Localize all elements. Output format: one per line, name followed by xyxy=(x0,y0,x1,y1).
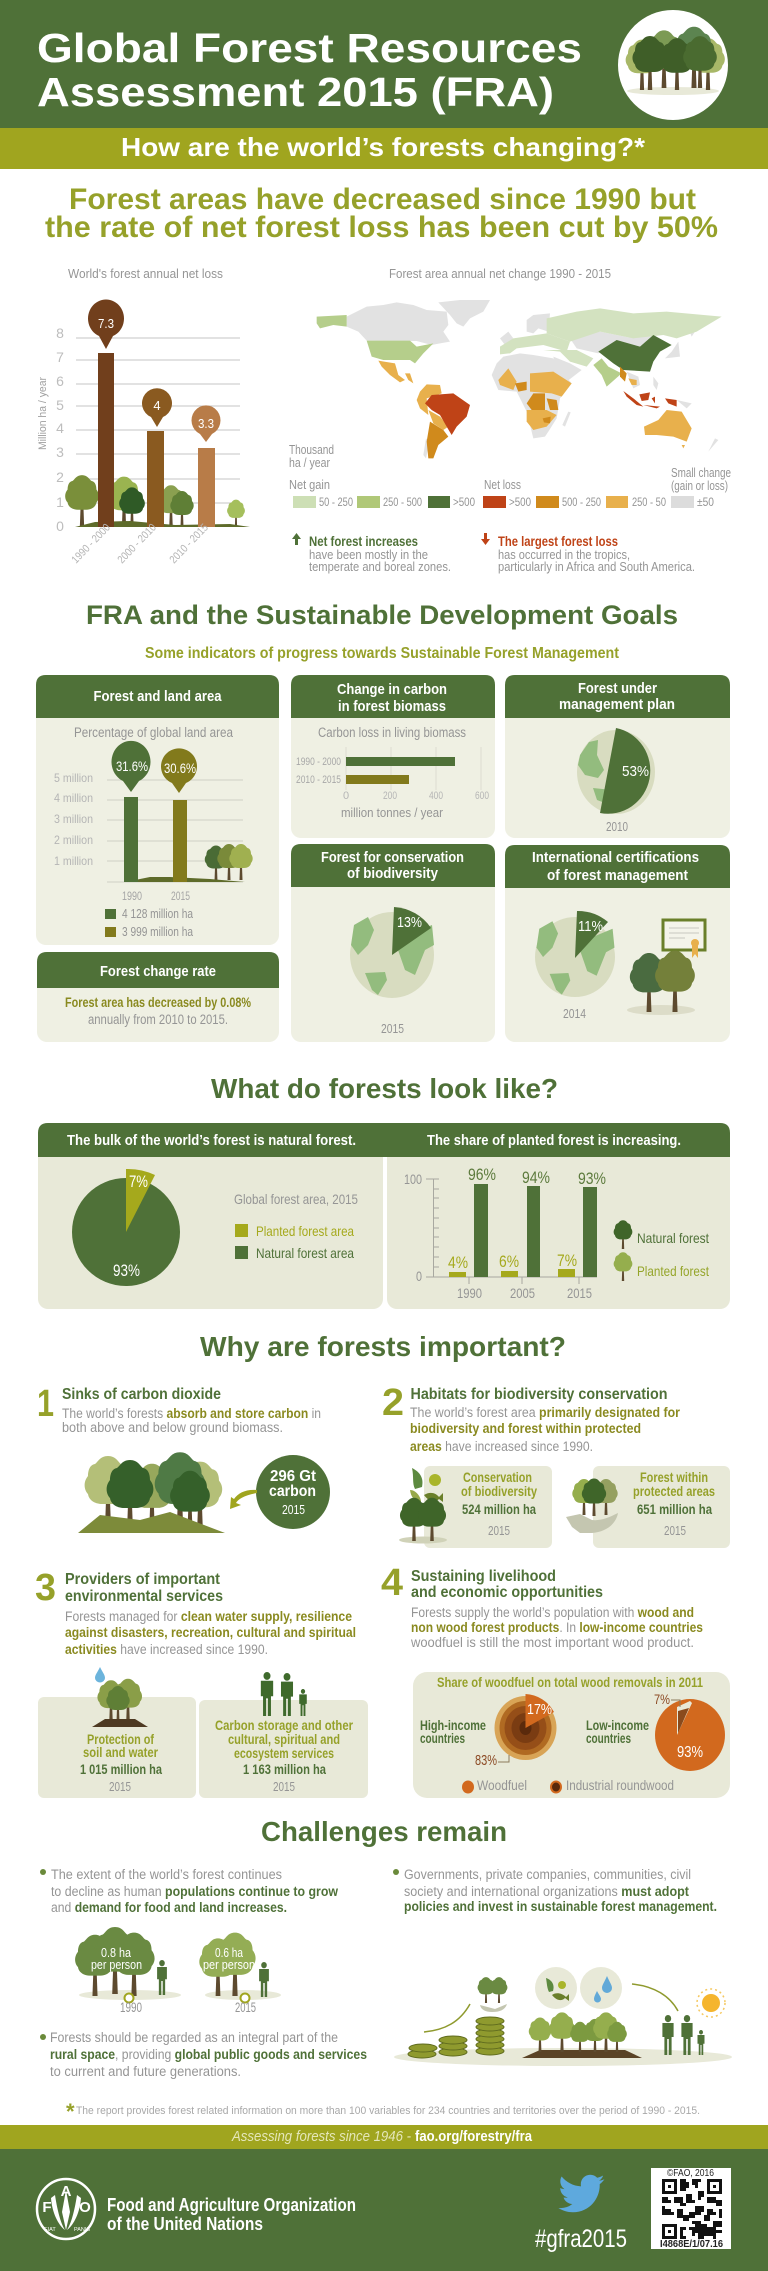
pie chart xyxy=(72,1169,180,1286)
block 1: sinks of carbon dioxide: both above and below ground biomass. xyxy=(62,1420,283,1435)
block 4: livelihood: 4 xyxy=(381,1562,403,1604)
bullet: governments: Governments, private companies, communities, civil xyxy=(404,1867,691,1882)
headline xyxy=(45,183,718,244)
bar chart: 0 xyxy=(416,1268,422,1284)
bullet: rural space: rural space, providing global public goods and services xyxy=(50,2047,367,2062)
legend: Industrial roundwood xyxy=(566,1778,674,1793)
panel: annual net loss bar chart: 4 xyxy=(56,420,64,436)
card: share of woodfuel: High-income xyxy=(420,1717,486,1733)
bar 1990-2000: 7.3 xyxy=(98,316,114,331)
chart: high-income log xyxy=(475,1694,556,1769)
bar chart: 100 xyxy=(404,1171,422,1187)
footer tagline band: fao.org/forestry/fra xyxy=(415,2128,533,2145)
panel: annual net loss bar chart: 2 xyxy=(56,469,64,485)
panel: change in carbon: 600 xyxy=(475,790,489,802)
block 2: habitats for biodiversity xyxy=(382,1382,730,1548)
block 3: environmental services: environmental services xyxy=(65,1588,223,1605)
section heading: why are forests important: Why are forests important? xyxy=(200,1331,566,1362)
callout: 296 Gt carbon: 2015 xyxy=(282,1502,305,1517)
title: Global Forest Resources xyxy=(37,25,582,71)
pie 11%: 11% xyxy=(578,919,603,935)
headline: the rate of net forest loss has been cut by 50% xyxy=(45,211,718,244)
card: conservation of biodiversity: 2015 xyxy=(488,1523,510,1538)
panel: forest and land area: 1990 xyxy=(122,889,142,903)
pie 11% xyxy=(535,911,615,997)
pictogram: hectares per person 2015 xyxy=(199,1933,281,2015)
icon: tree in hand xyxy=(478,1977,507,2012)
callout: 296 Gt carbon: carbon xyxy=(269,1483,316,1500)
pie 53%: 53% xyxy=(622,763,649,780)
pie chart: 7% xyxy=(129,1172,148,1191)
panel: forest under management plan: management plan xyxy=(559,696,675,713)
card: protection of soil and water xyxy=(38,1667,196,1798)
logo: FAO: PANIS xyxy=(74,2227,90,2233)
block 1: sinks of carbon dioxide: 1 xyxy=(37,1383,54,1425)
panel: natural forest share xyxy=(38,1123,386,1309)
map legend: >500 xyxy=(453,495,475,509)
legend: tree icons: Natural forest xyxy=(637,1230,709,1246)
card: carbon storage and services: ecosystem services xyxy=(234,1746,334,1761)
panel: annual net loss bar chart: 5 xyxy=(56,397,64,413)
card: share of woodfuel: countries xyxy=(586,1730,631,1746)
bar 2010-2015: 3.3 xyxy=(198,416,214,431)
section heading: SDG xyxy=(86,600,678,662)
pie 53% xyxy=(577,728,655,814)
map legend: 50 - 250 xyxy=(319,495,353,509)
bullet: populations xyxy=(40,1867,338,1915)
bubble: water xyxy=(580,1967,622,2009)
panel: international certifications: of forest management xyxy=(547,867,688,884)
bullet: governments xyxy=(393,1867,717,1914)
panel: forest and land area xyxy=(36,675,279,945)
map legend: ha / year xyxy=(289,455,331,470)
note: largest forest loss: The largest forest loss xyxy=(498,533,618,549)
chart: high-income log: 17% xyxy=(527,1701,552,1718)
card: share of woodfuel: countries xyxy=(420,1730,465,1746)
card: protection of soil and water: Protection of xyxy=(87,1732,154,1747)
card: share of woodfuel: Share of woodfuel on total wood removals in 2011 xyxy=(437,1675,703,1690)
panel: forest and land area: 1 million xyxy=(54,854,93,868)
panel: annual net loss bar chart: 2000 - 2010 xyxy=(116,522,159,566)
footnote: The report provides forest related information on more than 100 variables for 234 countries and territories over the period of 1990 - 2015. xyxy=(76,2105,700,2117)
QR code: I4868E/1/07.16 xyxy=(660,2239,723,2250)
card: conservation of biodiversity: 524 million ha xyxy=(462,1502,536,1517)
bullet: populations: The extent of the world’s forest continues xyxy=(51,1867,282,1882)
panel: change in carbon: 1990 - 2000 xyxy=(296,756,341,768)
panel: annual net loss bar chart: Million ha / year xyxy=(37,377,49,450)
logo: FAO: O xyxy=(79,2199,91,2216)
subtitle band xyxy=(0,128,768,169)
panel: annual net loss bar chart: 3 xyxy=(56,444,64,460)
QR code: ©FAO, 2016 xyxy=(667,2168,714,2179)
panel: change in carbon: 2010 - 2015 xyxy=(296,774,341,786)
card: share of woodfuel xyxy=(413,1672,730,1798)
block 3: environmental services: activities have increased since 1990. xyxy=(65,1642,268,1657)
bar chart: 2005 xyxy=(510,1285,535,1301)
panel: change in carbon: Carbon loss in living biomass xyxy=(318,725,466,740)
icon: tree in hand xyxy=(566,1479,618,1533)
bullet: governments: policies and invest in sustainable forest management. xyxy=(404,1899,717,1914)
icon: certificate xyxy=(663,920,705,958)
panel: annual net loss bar chart: World's forest annual net loss xyxy=(68,266,223,281)
card: carbon storage and services: Carbon storage and other xyxy=(215,1718,354,1733)
footer xyxy=(0,2149,768,2271)
section heading: challenges remain: Challenges remain xyxy=(261,1816,507,1847)
card: protection of soil and water: soil and water xyxy=(83,1745,159,1760)
panel: world map xyxy=(289,266,731,574)
panel: annual net loss bar chart: 7 xyxy=(56,349,64,365)
panel: annual net loss bar chart xyxy=(37,266,250,566)
icon: planted forest xyxy=(522,2012,642,2058)
panel: change in carbon xyxy=(291,675,495,838)
choropleth map xyxy=(317,300,722,458)
panel: forest change rate: annually from 2010 to 2015. xyxy=(88,1012,228,1027)
icon: coin stacks xyxy=(408,2017,504,2058)
card: forest within protected areas: 651 million ha xyxy=(637,1502,712,1517)
bar chart: 94% xyxy=(522,1168,550,1187)
panel: forest for conservation of biodiversity xyxy=(291,844,495,1042)
chart: high-income log: 83% xyxy=(475,1753,497,1769)
panel: forest and land area: Forest and land area xyxy=(94,688,222,705)
callout: 296 Gt carbon: 296 Gt xyxy=(270,1468,317,1485)
card: forest within protected areas xyxy=(566,1466,730,1548)
legend: Natural forest area xyxy=(256,1245,354,1261)
panel: forest change rate: Forest area has decreased by 0.08% xyxy=(65,995,251,1010)
bar chart xyxy=(404,1165,606,1301)
pie 13%: 13% xyxy=(397,915,422,931)
chart: low-income pie: 7% xyxy=(654,1691,670,1707)
organization name: Food and Agriculture Organization xyxy=(107,2195,356,2215)
chart: low-income pie xyxy=(654,1691,725,1771)
card: conservation of biodiversity: of biodiversity xyxy=(461,1484,537,1499)
logo: FAO: A xyxy=(61,2183,72,2200)
map legend: Net loss xyxy=(484,477,521,492)
block 2: habitats for biodiversity: 2 xyxy=(382,1382,404,1424)
icon: drop and tree xyxy=(92,1667,148,1727)
legend xyxy=(235,1223,354,1261)
icon: trees xyxy=(627,951,695,1015)
map legend: >500 xyxy=(509,495,531,509)
legend: Woodfuel xyxy=(477,1778,527,1793)
organization name: of the United Nations xyxy=(107,2214,263,2234)
panel: annual net loss bar chart: 6 xyxy=(56,373,64,389)
icon: family xyxy=(662,2015,704,2055)
header banner xyxy=(0,0,768,128)
panel: annual net loss bar chart: 2010 - 2015 xyxy=(168,522,211,566)
section heading: SDG: FRA and the Sustainable Development Goals xyxy=(86,600,678,630)
panel: forest and land area: 3 million xyxy=(54,812,93,826)
panel: international certifications xyxy=(505,845,730,1042)
panel: forest for conservation of biodiversity: of biodiversity xyxy=(347,865,439,882)
bullet: rural space xyxy=(40,2030,367,2079)
panel: forest and land area: 5 million xyxy=(54,771,93,785)
block 2: habitats for biodiversity: The world’s forest area primarily designated for xyxy=(410,1405,681,1420)
illustration: forest xyxy=(78,1452,225,1533)
block 3: environmental services: 3 xyxy=(35,1567,56,1609)
map legend: 250 - 50 xyxy=(632,495,666,509)
panel: international certifications: International certifications xyxy=(532,849,699,866)
icon: animals and tree xyxy=(399,1468,447,1544)
block 4: livelihood: and economic opportunities xyxy=(411,1584,603,1601)
footnote xyxy=(66,2099,700,2124)
panel: forest for conservation of biodiversity: Forest for conservation xyxy=(321,849,464,866)
bar 1990: 31.6% xyxy=(116,759,148,774)
card: forest within protected areas: 2015 xyxy=(664,1523,686,1538)
map legend: ±50 xyxy=(697,495,714,509)
panel: forest change rate xyxy=(37,952,279,1042)
card: carbon storage and services: cultural, spiritual and xyxy=(228,1732,340,1747)
pictogram: hectares per person 1990: per person xyxy=(91,1957,142,1972)
note: largest forest loss: has occurred in the tropics, xyxy=(498,547,630,562)
map legend: Small change xyxy=(671,465,731,480)
legend: Planted forest area xyxy=(256,1223,354,1239)
note: net forest increases xyxy=(292,533,451,574)
footer tagline band xyxy=(0,2125,768,2149)
bullet: rural space: to current and future generations. xyxy=(50,2064,241,2079)
panel: planted forest share: The share of planted forest is increasing. xyxy=(427,1133,681,1149)
block 4: livelihood: woodfuel is still the most important wood product. xyxy=(410,1635,694,1650)
block 2: habitats for biodiversity: biodiversity and forest within protected xyxy=(410,1421,641,1436)
pictogram: hectares per person 1990: 0.8 ha xyxy=(101,1945,132,1960)
bar 2000-2010 xyxy=(142,388,172,527)
bar 2015: 30.6% xyxy=(164,761,196,776)
title: Assessment 2015 (FRA) xyxy=(37,69,554,115)
panel: change in carbon: in forest biomass xyxy=(338,698,446,715)
note: net forest increases: Net forest increases xyxy=(309,533,418,549)
card: carbon storage and services: 1 163 million ha xyxy=(243,1762,326,1777)
block 2: habitats for biodiversity: Habitats for biodiversity conservation xyxy=(410,1386,668,1403)
footer tagline band: Assessing forests since 1946 - xyxy=(231,2128,411,2145)
block 1: sinks of carbon dioxide: The world’s forests absorb and store carbon in xyxy=(62,1406,321,1421)
pictogram: hectares per person 1990: 1990 xyxy=(120,1999,142,2015)
bar 2010-2015 xyxy=(191,405,220,527)
bar chart: 4% xyxy=(448,1253,468,1272)
map legend xyxy=(289,442,731,509)
legend xyxy=(105,906,194,939)
bullet: rural space: Forests should be regarded as an integral part of the xyxy=(50,2030,338,2045)
arrow: growth xyxy=(424,2004,470,2032)
block 1: sinks of carbon dioxide: Sinks of carbon dioxide xyxy=(62,1386,221,1403)
map legend: Net gain xyxy=(289,477,330,492)
bar chart: 1990 xyxy=(457,1285,482,1301)
card: protection of soil and water: 2015 xyxy=(109,1779,131,1794)
bar 1990-2000 xyxy=(88,299,124,527)
card: share of woodfuel: Low-income xyxy=(586,1717,649,1733)
note: net forest increases: temperate and boreal zones. xyxy=(309,559,451,574)
card: conservation of biodiversity xyxy=(399,1466,552,1548)
bubble: biodiversity xyxy=(535,1967,577,2009)
pictogram: hectares per person 2015: 0.6 ha xyxy=(215,1945,244,1960)
bar chart: 7% xyxy=(557,1251,577,1270)
block 4: livelihood: Sustaining livelihood xyxy=(411,1568,556,1585)
panel: forest and land area: 2 million xyxy=(54,833,93,847)
card: carbon storage and services: 2015 xyxy=(273,1779,295,1794)
icon: trees in circle xyxy=(618,10,728,120)
panel: annual net loss bar chart: 1 xyxy=(56,494,64,510)
bullet: governments: society and international organizations must adopt xyxy=(404,1884,689,1899)
title xyxy=(37,25,582,115)
arrow: benefits to people xyxy=(632,1984,678,2011)
logo: FAO: F xyxy=(42,2199,52,2216)
panel: natural forest share: Global forest area, 2015 xyxy=(234,1191,358,1207)
organization name xyxy=(107,2195,356,2234)
legend: tree icons: Planted forest xyxy=(637,1263,709,1279)
pictogram: hectares per person 2015: 2015 xyxy=(235,1999,256,2015)
panel: change in carbon: 200 xyxy=(383,790,397,802)
card: forest within protected areas: protected areas xyxy=(633,1484,715,1499)
icon: twitter bird xyxy=(558,2175,604,2212)
footnote: * xyxy=(66,2099,75,2124)
panel: forest under management plan xyxy=(505,675,730,838)
bullet: populations: to decline as human populations continue to grow xyxy=(51,1884,338,1899)
panel: international certifications: 2014 xyxy=(563,1006,586,1021)
legend: 4 128 million ha xyxy=(122,906,194,921)
headline: Forest areas have decreased since 1990 but xyxy=(69,183,696,216)
panel: annual net loss bar chart: 1990 - 2000 xyxy=(70,522,113,566)
bar chart: 6% xyxy=(499,1252,519,1271)
bar 2015 xyxy=(161,748,197,882)
panel: forest change rate: Forest change rate xyxy=(100,963,216,980)
section heading: SDG: Some indicators of progress towards Sustainable Forest Management xyxy=(145,645,619,662)
bar chart: 2015 xyxy=(567,1285,592,1301)
note: net forest increases: have been mostly in the xyxy=(309,547,428,562)
block 4: livelihood xyxy=(381,1562,730,1798)
card: conservation of biodiversity: Conservation xyxy=(463,1470,532,1485)
panel: annual net loss bar chart: 0 xyxy=(56,518,64,534)
bar 2000-2010: 4 xyxy=(153,398,161,413)
legend: 3 999 million ha xyxy=(122,924,194,939)
bullet: populations: and demand for food and land increases. xyxy=(51,1900,287,1915)
panel: change in carbon: Change in carbon xyxy=(337,681,447,698)
map legend: 250 - 500 xyxy=(383,495,422,509)
section heading: what do forests look like: What do forests look like? xyxy=(211,1073,558,1104)
pictogram: hectares per person 1990 xyxy=(75,1927,181,2015)
callout: 296 Gt carbon xyxy=(230,1455,330,1529)
block 1: sinks of carbon dioxide xyxy=(37,1383,330,1533)
panel: natural forest share: The bulk of the world’s forest is natural forest. xyxy=(67,1133,356,1149)
panel: forest under management plan: Forest under xyxy=(578,680,657,697)
illustration: investment in forests xyxy=(394,1967,732,2066)
pie chart: 93% xyxy=(113,1261,140,1280)
pictogram: hectares per person 2015: per person xyxy=(203,1957,255,1972)
QR code xyxy=(651,2168,731,2250)
panel: forest and land area: 4 million xyxy=(54,791,93,805)
block 3: environmental services: against disasters, recreation, cultural and spiritual xyxy=(65,1625,356,1640)
legend: tree icons xyxy=(614,1220,709,1281)
panel: annual net loss bar chart: 8 xyxy=(56,325,64,341)
panel: world map: Forest area annual net change 1990 - 2015 xyxy=(389,266,611,281)
icon: sun xyxy=(697,1989,725,2017)
panel: forest and land area: Percentage of global land area xyxy=(74,725,233,740)
block 3: environmental services: Forests managed for clean water supply, resilience xyxy=(65,1609,352,1624)
panel: planted forest share xyxy=(383,1123,730,1309)
map legend: Thousand xyxy=(289,442,334,457)
panel: forest under management plan: 2010 xyxy=(606,819,628,834)
block 2: habitats for biodiversity: areas have increased since 1990. xyxy=(410,1439,593,1454)
pie 13% xyxy=(350,907,434,998)
hashtag: #gfra2015 xyxy=(535,2225,627,2253)
map legend: (gain or loss) xyxy=(671,478,728,493)
legend xyxy=(462,1778,674,1794)
chart: low-income pie: 93% xyxy=(677,1744,703,1761)
panel: forest and land area: 2015 xyxy=(171,889,190,903)
bar chart: 93% xyxy=(578,1169,606,1188)
block 3: environmental services xyxy=(35,1567,368,1798)
panel: forest for conservation of biodiversity: 2015 xyxy=(381,1021,404,1036)
note: largest forest loss xyxy=(481,533,695,574)
block 3: environmental services: Providers of important xyxy=(65,1571,221,1588)
logo: FAO: FIAT xyxy=(44,2227,56,2233)
block 4: livelihood: Forests supply the world’s population with wood and xyxy=(411,1605,694,1620)
block 4: livelihood: non wood forest products. In low-income countries xyxy=(411,1620,703,1635)
map legend: 500 - 250 xyxy=(562,495,601,509)
card: carbon storage and services xyxy=(199,1672,368,1798)
note: largest forest loss: particularly in Africa and South America. xyxy=(498,559,695,574)
card: protection of soil and water: 1 015 million ha xyxy=(80,1762,162,1777)
bar 1990 xyxy=(112,741,151,882)
subtitle band: How are the world’s forests changing?* xyxy=(121,132,646,162)
logo: FAO xyxy=(37,2179,95,2239)
panel: change in carbon: 400 xyxy=(429,790,443,802)
bar chart: 96% xyxy=(468,1165,496,1184)
icon: family xyxy=(261,1672,307,1716)
panel: change in carbon: 0 xyxy=(343,790,349,802)
panel: change in carbon: million tonnes / year xyxy=(341,805,444,820)
card: forest within protected areas: Forest within xyxy=(640,1470,708,1485)
